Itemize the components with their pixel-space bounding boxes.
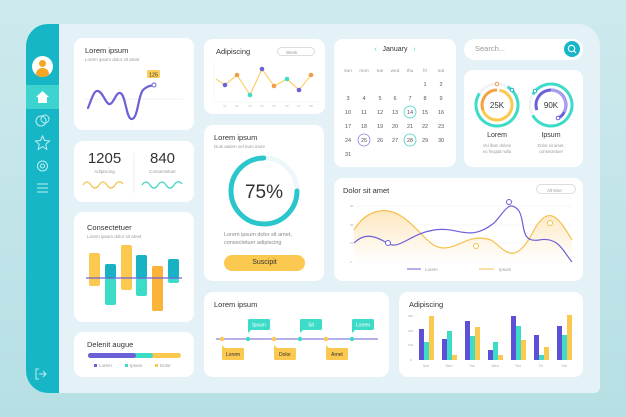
calendar grid: 6 (393, 96, 397, 102)
calendar grid: 1 (423, 82, 427, 88)
calendar grid: 27 (392, 138, 398, 144)
description: Lorem ipsum dolor sit amet, consectetuer adipiscing (224, 232, 292, 246)
legend: Ipsum (130, 363, 143, 368)
heading: Adipiscing (409, 300, 443, 309)
calendar grid: 3 (346, 96, 350, 102)
calendar grid: 29 (422, 138, 428, 144)
labels: Dolor sit amet, (538, 143, 564, 148)
timeline graphic (216, 319, 378, 360)
timeline graphic: Sit (308, 322, 315, 328)
labels: consectetuer (539, 149, 564, 154)
calendar grid: tue (377, 68, 384, 74)
grouped bars (408, 314, 572, 368)
grouped bars: Mon (446, 364, 452, 368)
legend: Dolor (160, 363, 171, 368)
calendar grid: 28 (407, 138, 413, 144)
wave chart: 125 (149, 72, 158, 78)
calendar grid: 10 (345, 110, 351, 116)
dropdown all time: All time (547, 188, 562, 192)
calendar grid: thu (407, 68, 414, 74)
labels: Lorem (487, 132, 507, 139)
panel: adipiscing bar chart (399, 292, 583, 377)
grouped bars: Tue (469, 364, 475, 368)
panel: adipiscing line (204, 39, 325, 114)
calendar grid: mon (359, 69, 369, 74)
chart: Ipsum (499, 267, 512, 272)
button suscipit: Suscipit (252, 259, 277, 266)
panel: calendar (334, 39, 456, 167)
line chart: 05 (272, 104, 276, 108)
grouped bars: Thu (515, 364, 521, 368)
dropdown week (277, 47, 315, 56)
calendar grid: 8 (423, 96, 427, 102)
chart: 20 (350, 223, 354, 227)
floating bar chart (86, 245, 182, 311)
calendar grid: fri (423, 68, 427, 74)
grouped bars: Wed (491, 364, 499, 368)
labels: eu feugiat nulla (483, 149, 512, 154)
line chart: 02 (235, 104, 239, 108)
calendar grid: 20 (392, 124, 398, 130)
progress ring (228, 156, 300, 226)
calendar grid: 4 (362, 96, 366, 102)
heading: Delenit augue (87, 340, 133, 349)
dropdown all time (536, 184, 576, 194)
stat 1205: 1205 (88, 150, 121, 167)
legend (94, 363, 171, 368)
grouped bars: Sat (561, 364, 567, 368)
calendar grid: 30 (438, 138, 444, 144)
panel: stats (74, 141, 194, 202)
grouped bars: Sun (423, 364, 429, 368)
line chart: 03 (248, 104, 252, 108)
heading: Lorem ipsum (214, 133, 257, 142)
calendar grid: 5 (378, 96, 382, 102)
wave chart (85, 70, 183, 120)
grouped bars: 100 (408, 343, 413, 347)
icon: avatar (32, 56, 53, 77)
calendar grid: 7 (408, 96, 412, 102)
chart: Lorem (425, 267, 438, 272)
labels: Ipsum (541, 132, 561, 139)
button suscipit (224, 255, 305, 271)
chart (350, 199, 572, 272)
calendar grid: 9 (439, 96, 443, 102)
panel: timeline (204, 292, 389, 377)
calendar grid: 16 (438, 110, 444, 116)
legend: Lorem (99, 363, 112, 368)
calendar grid: sun (344, 69, 352, 74)
subtext: Duis autem vel eum iriure (214, 144, 265, 149)
calendar grid: 21 (407, 124, 413, 130)
labels (483, 132, 564, 154)
timeline graphic: Amet (331, 352, 343, 358)
sidebar (26, 24, 59, 393)
chart: 0 (350, 260, 352, 264)
line chart: 07 (297, 104, 301, 108)
heading: Lorem ipsum (85, 46, 128, 55)
line chart: 01 (223, 104, 227, 108)
stat 1205: Adipiscing (94, 169, 115, 174)
calendar grid: 14 (407, 110, 413, 116)
grouped bars: 300 (408, 314, 413, 318)
stat 840: Consectetuer (149, 169, 176, 174)
heading: Consectetuer (87, 223, 132, 232)
calendar grid: 25 (361, 138, 367, 144)
rings: 90K (544, 101, 559, 110)
grouped bars: 200 (408, 329, 413, 333)
timeline graphic: Dolor (279, 352, 291, 358)
calendar grid: wed (391, 68, 400, 74)
panel: consectetuer bars (74, 212, 194, 322)
labels: Vel illum dolore (483, 143, 512, 148)
rings (474, 82, 574, 154)
mini waves (82, 153, 182, 193)
grouped bars: 0 (410, 358, 412, 362)
panel: delenit augue (74, 332, 194, 377)
chart: 10 (350, 241, 354, 245)
calendar grid: 11 (361, 110, 367, 116)
panel: dolor sit amet area chart (334, 178, 583, 281)
icon set (34, 114, 51, 380)
stacked bar (88, 353, 181, 368)
search bar (464, 39, 583, 60)
stat 840: 840 (150, 150, 175, 167)
line chart: 06 (285, 104, 289, 108)
month header: ‹ January › (374, 46, 416, 53)
timeline graphic: Lorem (226, 352, 240, 358)
heading: Adipiscing (216, 47, 250, 56)
calendar grid: 31 (345, 152, 351, 158)
grouped bars: Fri (539, 364, 543, 368)
calendar grid: 2 (439, 82, 443, 88)
calendar grid: 26 (377, 138, 383, 144)
calendar grid: 19 (377, 124, 383, 130)
calendar grid: 23 (438, 124, 444, 130)
timeline graphic: Ipsum (252, 322, 266, 328)
heading: Lorem ipsum (214, 300, 257, 309)
line chart: 08 (309, 104, 313, 108)
calendar grid (344, 68, 445, 158)
calendar grid: 22 (422, 124, 428, 130)
calendar grid: 18 (361, 124, 367, 130)
calendar grid: 13 (392, 110, 398, 116)
subtext: Lorem ipsum dolor sit amet (87, 234, 141, 239)
legend (407, 268, 421, 270)
calendar grid: sat (438, 68, 445, 74)
search bar: Search... (475, 44, 505, 53)
line chart (214, 62, 319, 108)
subtext: Lorem ipsum dolor sit amet (85, 57, 139, 62)
progress ring: 75% (245, 182, 283, 203)
panel: lorem wave (74, 38, 194, 130)
panel: ring stats (464, 70, 583, 167)
dropdown week: Week (286, 50, 297, 55)
icon: home active (26, 85, 59, 109)
icon: search (564, 41, 580, 57)
calendar grid: 15 (422, 110, 428, 116)
calendar grid: 12 (377, 110, 383, 116)
calendar grid: 24 (345, 138, 351, 144)
chart: 30 (350, 204, 354, 208)
timeline graphic: Lorem (356, 322, 370, 328)
heading: Dolor sit amet (343, 186, 389, 195)
line chart: 04 (260, 104, 264, 108)
rings: 25K (490, 101, 505, 110)
stat 840 (149, 150, 176, 174)
panel: 75% progress (204, 125, 324, 281)
calendar grid: 17 (345, 124, 351, 130)
